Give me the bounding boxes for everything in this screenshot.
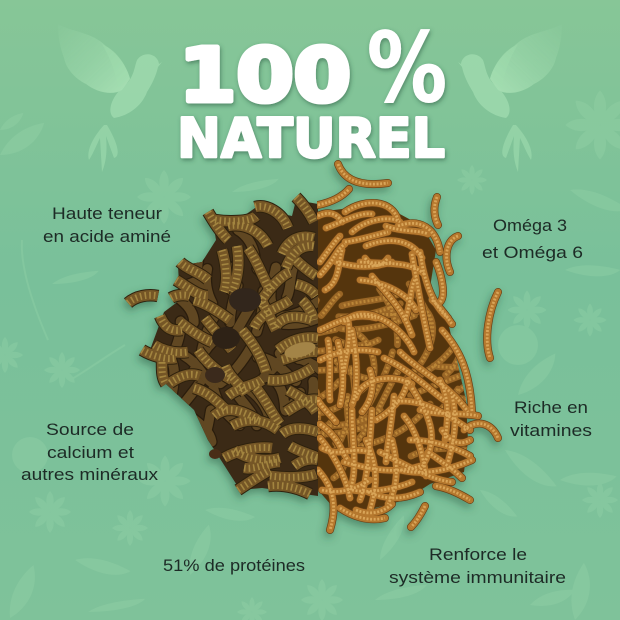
title: NATUREL: [177, 107, 445, 170]
label: protein: 51% de protéines: [163, 556, 305, 575]
label: calcium: [21, 420, 159, 484]
label: calcium: calcium et: [47, 443, 134, 462]
title: %: [367, 12, 447, 124]
label: omega: [482, 216, 583, 262]
label: omega: Oméga 3: [493, 216, 567, 235]
label: amino acids: Haute teneur: [52, 204, 162, 223]
label: amino acids: [43, 204, 171, 246]
left bird: [58, 24, 162, 172]
label: vitamins: Riche en: [514, 398, 588, 417]
label: omega: et Oméga 6: [482, 243, 583, 262]
right bird: [458, 24, 562, 172]
label: calcium: autres minéraux: [21, 465, 159, 484]
title: 100: [179, 33, 351, 119]
left half: dark larvae: [120, 192, 320, 506]
label: calcium: Source de: [46, 420, 134, 439]
label: amino acids: en acide aminé: [43, 227, 171, 246]
right half: golden mealworms: [314, 160, 503, 541]
small fragment: [209, 449, 221, 459]
label: vitamins: [510, 398, 592, 440]
label: vitamins: vitamines: [510, 421, 592, 440]
label: immune system: système immunitaire: [389, 568, 566, 587]
insect pile: dried larvae split left and mealworms right: [120, 160, 503, 541]
label: immune system: Renforce le: [429, 545, 527, 564]
title: [177, 12, 447, 170]
label: immune system: [389, 545, 566, 587]
